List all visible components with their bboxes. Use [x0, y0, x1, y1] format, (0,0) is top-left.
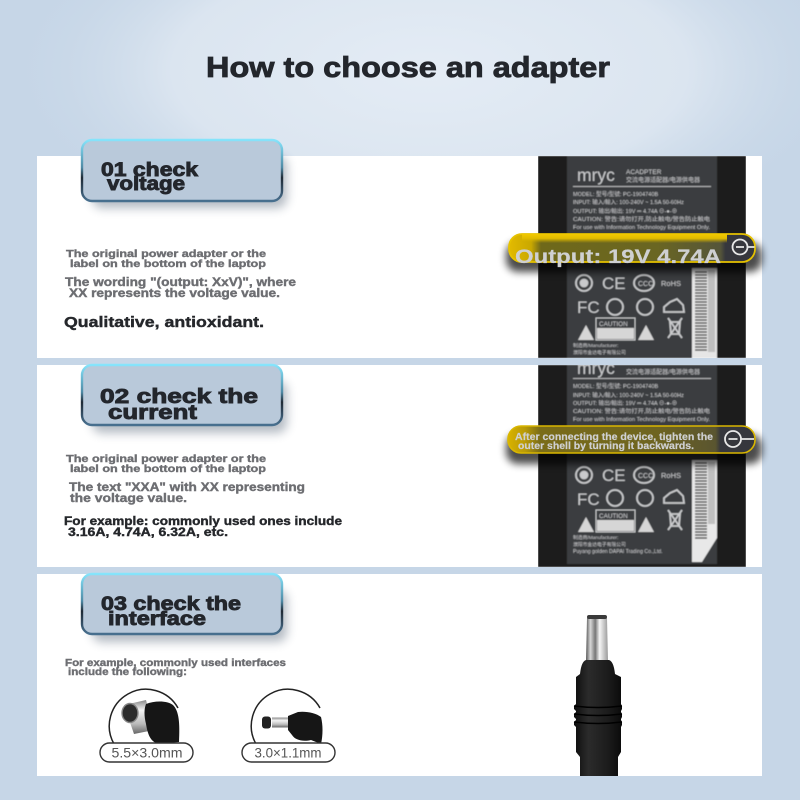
step badge: 03 check the interface: interface: [108, 608, 206, 630]
certification marks: [576, 467, 684, 530]
adapter label photo 2: CAUTION: 警告:请勿打开,防止触电/警告防止触电: [573, 407, 710, 415]
callout: tighten instruction: [506, 426, 762, 464]
text: voltage wording: XX represents the voltage value.: [69, 286, 280, 300]
connector 5.5×3.0mm: [100, 689, 193, 762]
adapter label photo 1: CCC: [638, 281, 653, 288]
text: where to find the label: [66, 453, 266, 475]
adapter label photo 1: ACADPTER: [626, 169, 662, 176]
step badge: 01 check voltage: 01 check: [101, 159, 198, 181]
icon: polarity symbol: [725, 431, 754, 447]
adapter label photo 1: CE: [602, 274, 626, 293]
text: current examples: [64, 514, 342, 539]
large connector photo: [574, 615, 622, 776]
adapter label photo 2: OUTPUT: 输出/輸出: 19V ⎓ 4.74A ⊖-●-⊕: [573, 399, 677, 407]
callout: tighten instruction: After connecting the device, tighten the: [515, 432, 714, 443]
step badge: 02 check the current: [82, 365, 287, 433]
icon: polarity symbol: [732, 240, 754, 254]
text: where to find the label: The original power adapter or the: [66, 453, 266, 465]
adapter label photo 2: CCC: [638, 473, 653, 480]
step badge: 02 check the current: 02 check the: [100, 385, 258, 408]
adapter label photo 2: mryc: [577, 358, 615, 378]
panel: check voltage: [37, 140, 762, 358]
barcode sticker: [692, 460, 717, 562]
panel: check current: [37, 358, 762, 567]
text: where to find the label: [66, 248, 266, 270]
adapter label photo 1: For use with Information Technology Equipment Only.: [573, 225, 710, 231]
adapter label photo 1: CAUTION: [599, 321, 628, 328]
step badge: 02 check the current: current: [108, 401, 197, 424]
callout: output rating: Output: 19V 4.74A: [515, 247, 721, 268]
step badge: 03 check the interface: 03 check the: [101, 593, 241, 615]
text: current wording: The text "XXA" with XX representing: [69, 480, 305, 494]
adapter label photo 2: INPUT: 输入/輸入: 100-240V ~ 1.5A 50-60Hz: [573, 391, 684, 399]
callout: output rating: [506, 234, 762, 272]
adapter label photo 1: RoHS: [661, 279, 681, 288]
text: voltage wording: [65, 275, 296, 300]
adapter label photo 1: MODEL: 型号/型號: PC-1904740B: [573, 190, 658, 198]
certification marks: [576, 275, 684, 338]
callout: tighten instruction: outer shell by turning it backwards.: [518, 441, 694, 452]
connector 3.0×1.1mm: 3.0×1.1mm: [254, 744, 322, 760]
text: current wording: [69, 480, 305, 505]
text: qualitative: Qualitative, antioxidant.: [64, 315, 264, 331]
step badge: 01 check voltage: [82, 140, 287, 208]
text: where to find the label: label on the bottom of the laptop: [70, 463, 266, 475]
adapter label photo 2: 濮阳市金达电子有限公司: [573, 541, 626, 548]
text: current wording: the voltage value.: [70, 491, 187, 505]
adapter label photo 1: mryc: [577, 165, 615, 185]
step badge: 01 check voltage: voltage: [107, 173, 185, 195]
panel: check interface: [37, 574, 762, 776]
adapter label photo 1: [538, 156, 746, 358]
adapter label photo 1: OUTPUT: 输出/輸出: 19V ⎓ 4.74A ⊖-●-⊕: [573, 207, 677, 215]
title: How to choose an adapter: [206, 52, 610, 84]
adapter label photo 2: CE: [602, 466, 626, 485]
adapter label photo 2: Puyang golden DAPAI Trading Co.,Ltd.: [573, 549, 663, 555]
adapter label photo 2: For use with Information Technology Equipment Only.: [573, 417, 710, 423]
text: where to find the label: label on the bottom of the laptop: [70, 258, 266, 270]
text: current examples: 3.16A, 4.74A, 6.32A, etc.: [68, 525, 228, 539]
adapter label photo 2: 制造商/Manufacturer:: [573, 534, 618, 541]
connector 5.5×3.0mm: 5.5×3.0mm: [112, 744, 182, 760]
text: interface examples: include the following:: [68, 667, 187, 678]
adapter label photo 2: CAUTION: [599, 513, 628, 520]
adapter label photo 1: FC: [577, 298, 600, 317]
adapter label photo 1: 交流电源适配器/电源供电器: [626, 176, 700, 184]
adapter label photo 2: FC: [577, 490, 600, 509]
step badge: 03 check the interface: [82, 574, 287, 642]
text: current examples: For example: commonly used ones include: [64, 514, 342, 528]
text: where to find the label: The original power adapter or the: [66, 248, 266, 260]
connector 3.0×1.1mm: [242, 689, 335, 762]
adapter label photo 1: 制造商/Manufacturer:: [573, 342, 618, 349]
barcode sticker: [692, 268, 717, 358]
adapter label photo 2: MODEL: 型号/型號: PC-1904740B: [573, 382, 658, 390]
text: interface examples: For example, commonly used interfaces: [65, 658, 287, 669]
adapter label photo 2: 交流电源适配器/电源供电器: [626, 368, 700, 376]
adapter label photo 2: [538, 358, 746, 567]
adapter label photo 1: 濮阳市金达电子有限公司: [573, 349, 626, 356]
text: voltage wording: The wording "(output: XxV)", where: [65, 275, 296, 289]
adapter label photo 1: INPUT: 输入/輸入: 100-240V ~ 1.5A 50-60Hz: [573, 198, 684, 206]
adapter label photo 2: RoHS: [661, 471, 681, 480]
text: interface examples: [65, 658, 287, 678]
adapter label photo 1: CAUTION: 警告:请勿打开,防止触电/警告防止触电: [573, 215, 710, 223]
